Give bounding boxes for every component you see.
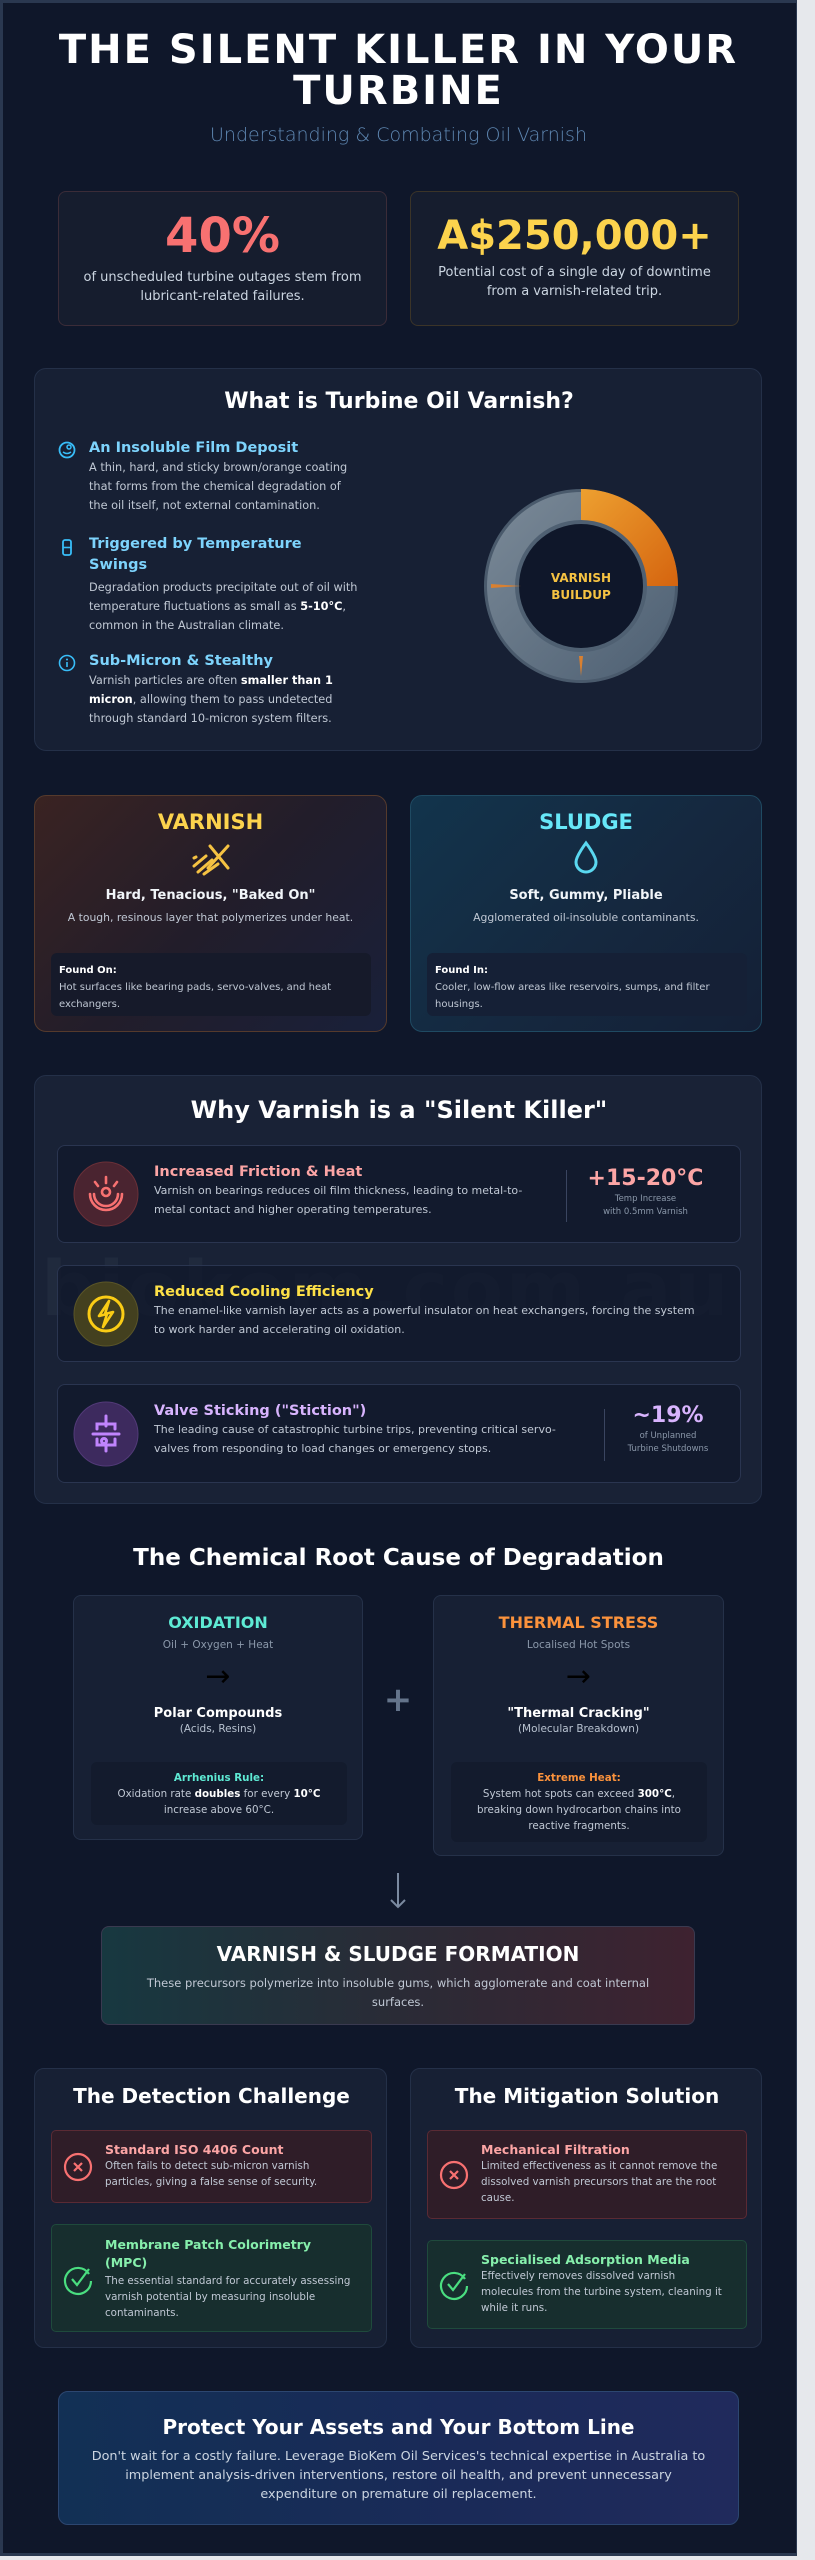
item: mechanical filtration: Mechanical Filtration bbox=[481, 2142, 630, 2157]
item: sub-micron: Sub-Micron & Stealthy bbox=[89, 653, 273, 669]
chart: varnish buildup donut: BUILDUP bbox=[551, 588, 611, 602]
item: insoluble film: that forms from the chemical degradation of bbox=[89, 480, 341, 493]
panel: detection challenge bbox=[34, 2068, 387, 2348]
found on box: Found On: bbox=[59, 965, 117, 976]
item: mechanical filtration bbox=[427, 2130, 747, 2219]
callout: formation: These precursors polymerize into insoluble gums, which agglomerate and coat internal surfaces. bbox=[147, 1976, 649, 2009]
stat card: 40% bbox=[58, 191, 387, 326]
item: MPC: The essential standard for accurately assessing varnish potential by measuring insoluble contaminants. bbox=[105, 2275, 350, 2319]
stat value: A$250,000+ bbox=[437, 213, 712, 259]
found on box: Hot surfaces like bearing pads, servo-valves, and heat exchangers. bbox=[59, 982, 331, 1010]
item: temperature swings: Swings bbox=[89, 557, 147, 573]
card: oxidation bbox=[73, 1595, 363, 1840]
icon: check bbox=[64, 2266, 92, 2296]
extreme heat box bbox=[451, 1762, 707, 1842]
item: temperature swings: common in the Australian climate. bbox=[89, 619, 284, 632]
item: adsorption media: molecules from the turbine system, cleaning it bbox=[481, 2286, 722, 2298]
heading: chemical root cause: The Chemical Root Cause of Degradation bbox=[133, 1545, 664, 1571]
stat: shutdowns: Turbine Shutdowns bbox=[628, 1444, 708, 1454]
item: insoluble film: A thin, hard, and sticky brown/orange coating bbox=[89, 461, 347, 474]
item: sub-micron: micron, allowing them to pass undetected bbox=[89, 693, 332, 706]
stat description bbox=[438, 265, 711, 299]
text: Don't wait for a costly failure. Leverage BioKem Oil Services's technical expertise in Australia to implement analysis-driven interventions, restore oil health, and prevent unnecessary expenditure on premature oil replacement. bbox=[92, 2449, 705, 2502]
heading: VARNISH bbox=[158, 810, 263, 834]
row: valve sticking bbox=[57, 1384, 741, 1483]
icon: info bbox=[58, 654, 76, 672]
heading: What is Turbine Oil Varnish? bbox=[224, 389, 574, 414]
icon: drop bbox=[574, 840, 598, 874]
heading: Why Varnish is a "Silent Killer" bbox=[191, 1096, 607, 1124]
found in box bbox=[427, 953, 747, 1016]
item: temperature swings bbox=[62, 536, 357, 632]
card: thermal stress: Localised Hot Spots bbox=[527, 1639, 630, 1651]
item: temperature swings: Degradation products precipitate out of oil with bbox=[89, 581, 357, 594]
text: The leading cause of catastrophic turbine trips, preventing critical servo-valves from responding to load changes or emergency stops. bbox=[154, 1423, 556, 1455]
subtitle: Hard, Tenacious, "Baked On" bbox=[106, 888, 315, 903]
item: sub-micron bbox=[58, 653, 333, 725]
arrow: → bbox=[205, 1659, 231, 1694]
item: insoluble film: An Insoluble Film Deposit bbox=[89, 440, 298, 456]
item: ISO 4406 bbox=[51, 2130, 372, 2203]
stat: shutdowns: ~19% bbox=[632, 1403, 704, 1428]
item: MPC: Membrane Patch Colorimetry bbox=[105, 2237, 311, 2252]
row: cooling bbox=[57, 1265, 741, 1362]
icon: plus: + bbox=[384, 1680, 412, 1720]
panel: mitigation solution bbox=[410, 2068, 762, 2348]
extreme heat box: reactive fragments. bbox=[528, 1820, 630, 1832]
heading: SLUDGE bbox=[539, 810, 633, 834]
item: temperature swings: temperature fluctuations as small as 5-10°C, bbox=[89, 600, 346, 613]
stat description: of unscheduled turbine outages stem from bbox=[83, 270, 362, 285]
label: THERMAL STRESS bbox=[499, 1613, 658, 1632]
item: adsorption media: while it runs. bbox=[481, 2302, 547, 2314]
icon: bolt bbox=[74, 1282, 138, 1346]
title: TURBINE bbox=[293, 68, 504, 114]
item: MPC: (MPC) bbox=[105, 2255, 147, 2270]
item: insoluble film: the oil itself, not external contamination. bbox=[89, 499, 320, 512]
stat value: 40% bbox=[165, 208, 280, 264]
icon: cross bbox=[64, 2152, 92, 2182]
icon: check bbox=[440, 2272, 468, 2300]
item: mechanical filtration: Limited effectiveness as it cannot remove the dissolved varnish precursors that are the root cause. bbox=[481, 2160, 717, 2204]
arrow: down bbox=[390, 1873, 406, 1908]
stat card: cost bbox=[410, 191, 739, 326]
rule box: increase above 60°C. bbox=[164, 1804, 274, 1816]
item: adsorption media: Effectively removes dissolved varnish bbox=[481, 2270, 675, 2282]
card: oxidation: (Acids, Resins) bbox=[180, 1723, 256, 1735]
card: thermal stress bbox=[433, 1595, 724, 1856]
text: Valve Sticking ("Stiction") bbox=[154, 1403, 366, 1419]
stat: shutdowns bbox=[628, 1403, 708, 1454]
card: thermal stress: "Thermal Cracking" bbox=[507, 1706, 650, 1721]
text: Reduced Cooling Efficiency bbox=[154, 1284, 374, 1300]
arrow: → bbox=[566, 1659, 591, 1694]
item: temperature swings: Triggered by Temperature bbox=[89, 536, 302, 552]
panel: varnish bbox=[34, 795, 387, 1032]
heading: Protect Your Assets and Your Bottom Line bbox=[162, 2415, 634, 2439]
card: thermal stress: (Molecular Breakdown) bbox=[518, 1723, 639, 1735]
item: MPC bbox=[51, 2224, 372, 2332]
rule box: Oxidation rate doubles for every 10°C bbox=[117, 1788, 320, 1800]
heading: The Detection Challenge bbox=[73, 2084, 350, 2108]
icon: cross bbox=[440, 2160, 468, 2190]
found on box bbox=[51, 953, 371, 1016]
card: oxidation: Oil + Oxygen + Heat bbox=[163, 1639, 273, 1651]
icon: battery bbox=[62, 539, 72, 556]
item: adsorption media: Specialised Adsorption Media bbox=[481, 2252, 690, 2267]
stat: temp: Temp Increase bbox=[615, 1194, 676, 1204]
watermark: biokem.com.au bbox=[41, 1244, 732, 1333]
extreme heat box: System hot spots can exceed 300°C, bbox=[483, 1788, 675, 1800]
icon: valve bbox=[74, 1402, 138, 1466]
label: OXIDATION bbox=[168, 1613, 268, 1632]
subtitle: Understanding & Combating Oil Varnish bbox=[210, 124, 587, 146]
icon: gauge bbox=[58, 442, 76, 458]
chart: varnish buildup donut bbox=[484, 489, 678, 683]
text bbox=[154, 1403, 556, 1455]
item: adsorption media bbox=[427, 2240, 747, 2329]
found in box: Found In: bbox=[435, 965, 488, 976]
icon: friction bbox=[74, 1162, 138, 1226]
text bbox=[154, 1164, 522, 1216]
panel: why silent killer bbox=[34, 1075, 762, 1504]
text: Varnish on bearings reduces oil film thickness, leading to metal-to-metal contact and higher operating temperatures. bbox=[154, 1184, 522, 1216]
item: sub-micron: Varnish particles are often smaller than 1 bbox=[89, 674, 333, 687]
callout: formation bbox=[101, 1926, 695, 2025]
text: The enamel-like varnish layer acts as a powerful insulator on heat exchangers, forcing the system to work harder and accelerating oil oxidation. bbox=[154, 1304, 695, 1336]
text: Increased Friction & Heat bbox=[154, 1164, 362, 1180]
stat: temp: with 0.5mm Varnish bbox=[603, 1207, 688, 1217]
stat description: Potential cost of a single day of downtime bbox=[438, 265, 711, 280]
text bbox=[154, 1284, 695, 1336]
stat: temp: +15-20°C bbox=[588, 1166, 703, 1191]
callout: CTA bbox=[58, 2391, 739, 2525]
stat description bbox=[83, 270, 362, 304]
stat description: lubricant-related failures. bbox=[140, 289, 305, 304]
found in box: Cooler, low-flow areas like reservoirs, sumps, and filter housings. bbox=[435, 982, 710, 1010]
row: friction bbox=[57, 1145, 741, 1243]
callout: formation: VARNISH & SLUDGE FORMATION bbox=[217, 1942, 579, 1966]
subtitle: Soft, Gummy, Pliable bbox=[509, 888, 663, 903]
stat: shutdowns: of Unplanned bbox=[640, 1431, 696, 1441]
title: THE SILENT KILLER IN YOUR bbox=[59, 27, 738, 73]
icon: scraping hand bbox=[192, 844, 230, 876]
item: sub-micron: through standard 10-micron system filters. bbox=[89, 712, 332, 725]
rule box bbox=[91, 1762, 347, 1825]
item: insoluble film bbox=[58, 440, 347, 512]
item: ISO 4406: Often fails to detect sub-micron varnish particles, giving a false sense of security. bbox=[105, 2160, 317, 2188]
description: A tough, resinous layer that polymerizes under heat. bbox=[68, 911, 353, 924]
description: Agglomerated oil-insoluble contaminants. bbox=[473, 911, 699, 924]
rule box: Arrhenius Rule: bbox=[174, 1772, 264, 1784]
panel: sludge bbox=[410, 795, 762, 1032]
stat description: from a varnish-related trip. bbox=[487, 284, 662, 299]
extreme heat box: breaking down hydrocarbon chains into bbox=[477, 1804, 681, 1816]
item: ISO 4406: Standard ISO 4406 Count bbox=[105, 2142, 283, 2157]
stat: temp bbox=[588, 1166, 703, 1217]
heading: The Mitigation Solution bbox=[455, 2084, 719, 2108]
chart: varnish buildup donut: VARNISH bbox=[551, 571, 611, 585]
extreme heat box: Extreme Heat: bbox=[537, 1772, 621, 1784]
title bbox=[59, 27, 738, 114]
card: oxidation: Polar Compounds bbox=[154, 1706, 282, 1721]
panel: what is varnish bbox=[34, 368, 762, 751]
